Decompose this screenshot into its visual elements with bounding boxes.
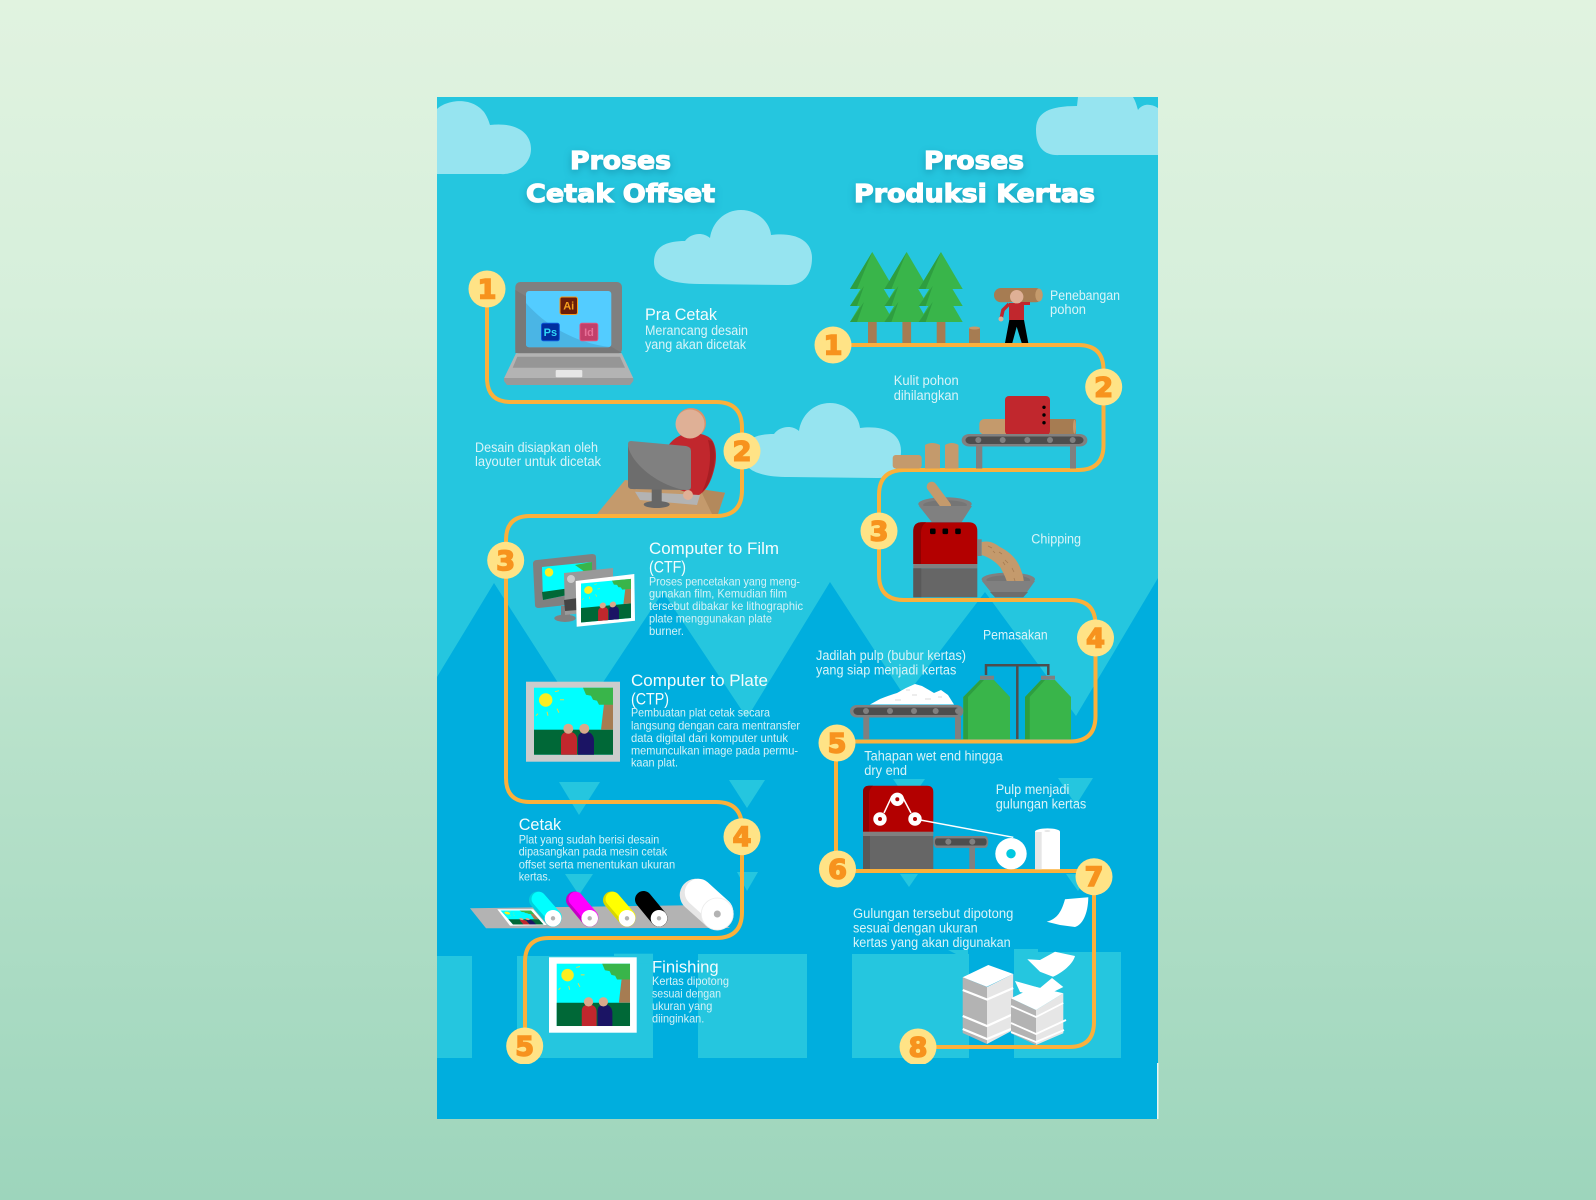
- text: Jadilah pulp: yang siap menjadi kertas: [816, 662, 957, 677]
- badge 1 right: [814, 326, 852, 364]
- text: Kulit pohon dihilangkan: Kulit pohon: [894, 373, 959, 388]
- text: Jadilah pulp: Jadilah pulp (bubur kertas): [816, 648, 966, 663]
- text: Computer to Film: gunakan film, Kemudian film: [649, 587, 787, 601]
- text: Tahapan wet end: dry end: [864, 763, 907, 778]
- panel edge line: [1157, 1063, 1158, 1119]
- text: Pulp menjadi gulungan: gulungan kertas: [996, 797, 1087, 812]
- badge 1 right: 1: [824, 330, 842, 362]
- badge 8 right: 8: [909, 1032, 927, 1064]
- icon: finished print: [549, 957, 637, 1033]
- icon: chipping machine: [913, 487, 1035, 597]
- badge 3 right: 3: [870, 516, 888, 548]
- icon: pine trees: [850, 252, 980, 343]
- icon: debarking machine: [893, 396, 1087, 468]
- badge 8 right: [900, 1028, 936, 1066]
- text: Gulungan tersebut: sesuai dengan ukuran: [853, 920, 978, 935]
- title: Proses Produksi Kertas: Produksi Kertas: [854, 179, 1095, 208]
- icon: laptop with design apps: [504, 282, 633, 385]
- text: Kulit pohon dihilangkan: [894, 373, 959, 403]
- text: Computer to Film: [649, 539, 803, 638]
- badge 2 left: [724, 432, 760, 470]
- badge 6 right: [819, 850, 856, 888]
- icon: laptop with design apps: Ps: [544, 327, 557, 339]
- text: Cetak: [519, 815, 675, 884]
- text: Cetak: dipasangkan pada mesin cetak: [519, 845, 667, 859]
- badge 4 left: [724, 818, 760, 855]
- text: Gulungan tersebut: kertas yang akan digunakan: [853, 935, 1011, 950]
- title: Proses Cetak Offset: [526, 146, 715, 208]
- text: Computer to Film: Proses pencetakan yang meng-: [649, 574, 800, 588]
- text: Jadilah pulp: [816, 648, 966, 677]
- badge 3 right: [860, 512, 898, 550]
- title: Proses Cetak Offset: Proses: [570, 146, 671, 175]
- text: Computer to Plate: memunculkan image pada permu-: [631, 743, 798, 757]
- badge 4 right: [1077, 620, 1114, 656]
- badge 3 left: [487, 542, 524, 579]
- text: Computer to Film: burner.: [649, 624, 684, 638]
- badge 1 left: 1: [478, 274, 496, 306]
- text: Penebangan pohon: Penebangan: [1050, 288, 1120, 303]
- title: Proses Produksi Kertas: [854, 146, 1095, 208]
- text: Cetak: kertas.: [519, 870, 551, 884]
- text: Penebangan pohon: [1050, 288, 1120, 317]
- text: Computer to Plate: Pembuatan plat cetak secara: [631, 706, 770, 720]
- text: Computer to Plate: kaan plat.: [631, 756, 678, 770]
- icon: cooking tanks and pulp conveyor: [850, 665, 1071, 739]
- text: Cetak: offset serta menentukan ukuran: [519, 857, 675, 871]
- badge 2 right: [1085, 368, 1122, 406]
- text: Desain disiapkan: [475, 440, 601, 469]
- text: Tahapan wet end: [864, 749, 1003, 778]
- badge 5 left: 5: [515, 1032, 534, 1062]
- background panel: [437, 97, 1158, 1119]
- text: Tahapan wet end: Tahapan wet end hingga: [864, 749, 1003, 764]
- icon: laptop with design apps: Ai: [563, 300, 574, 312]
- text: Computer to Film: (CTF): [649, 558, 686, 577]
- title: Proses Cetak Offset: Cetak Offset: [526, 179, 715, 208]
- infographic poster: [437, 97, 1158, 1119]
- text: Pulp menjadi gulungan: Pulp menjadi: [996, 782, 1069, 797]
- badge 7 right: 7: [1085, 862, 1103, 893]
- badge 4 right: 4: [1086, 624, 1105, 654]
- text: Gulungan tersebut: Gulungan tersebut dipotong: [853, 906, 1013, 921]
- text: Pulp menjadi gulungan: [996, 782, 1087, 812]
- badge 1 left: [468, 270, 506, 308]
- text: Desain disiapkan: Desain disiapkan oleh: [475, 440, 598, 455]
- icon: offset press rollers: [470, 892, 733, 930]
- right orange path: [833, 345, 1104, 1047]
- text: Pra Cetak: yang akan dicetak: [645, 337, 746, 352]
- badge 3 left: 3: [496, 546, 515, 577]
- text: Penebangan pohon: pohon: [1050, 302, 1086, 317]
- title: Proses Produksi Kertas: Proses: [924, 146, 1024, 175]
- text: Finishing: Finishing: [652, 957, 719, 976]
- text: Finishing: sesuai dengan: [652, 986, 721, 1000]
- badge 5 right: 5: [828, 728, 846, 760]
- icon: computer to film monitors and photo: [533, 554, 635, 627]
- text: Pra Cetak: Pra Cetak: [645, 305, 717, 324]
- text: Cetak: Cetak: [519, 815, 562, 834]
- icon: lumberjack carrying log: [994, 288, 1043, 343]
- badge 4 left: 4: [733, 822, 751, 853]
- badge 7 right: [1076, 858, 1112, 895]
- text: Computer to Film: Computer to Film: [649, 539, 779, 558]
- text: Finishing: Kertas dipotong: [652, 974, 729, 988]
- text: Computer to Film: plate menggunakan plate: [649, 612, 772, 626]
- text: Kulit pohon dihilangkan: dihilangkan: [894, 388, 959, 403]
- left orange path: [487, 289, 742, 1046]
- text: Desain disiapkan: layouter untuk dicetak: [475, 454, 601, 469]
- icon: falling sheets and paper stacks: [963, 897, 1088, 1045]
- text: Computer to Plate: Computer to Plate: [631, 671, 768, 690]
- badge 5 left: [506, 1028, 543, 1064]
- text: Pra Cetak: [645, 305, 748, 352]
- badge 5 right: [818, 724, 856, 762]
- text: Finishing: ukuran yang: [652, 999, 712, 1013]
- text: Computer to Film: tersebut dibakar ke lithographic: [649, 599, 803, 613]
- badge 2 left: 2: [733, 436, 751, 468]
- icon: layouter at computer: [597, 408, 725, 514]
- inverted triangles and blocks: [437, 778, 1121, 1058]
- icon: computer to plate image: [526, 682, 620, 762]
- text: Pra Cetak: Merancang desain: [645, 323, 748, 338]
- text: Computer to Plate: data digital dari komputer untuk: [631, 731, 788, 745]
- text: Chipping: Chipping: [1031, 531, 1081, 546]
- mountains: [437, 578, 1158, 1119]
- badge 6 right: 6: [828, 854, 847, 886]
- clouds: [437, 97, 1158, 478]
- icon: laptop with design apps: Id: [584, 327, 594, 339]
- text: Computer to Plate: langsung dengan cara mentransfer: [631, 718, 800, 732]
- text: Cetak: Plat yang sudah berisi desain: [519, 832, 659, 846]
- text: Finishing: diinginkan.: [652, 1012, 704, 1026]
- text: Computer to Plate: (CTP): [631, 690, 669, 709]
- text: Pemasakan: Pemasakan: [983, 627, 1048, 642]
- icon: paper machine and rolls: [863, 786, 1060, 869]
- text: Finishing: [652, 957, 729, 1026]
- text: Computer to Plate: [631, 671, 800, 770]
- badge 2 right: 2: [1094, 372, 1113, 404]
- text: Gulungan tersebut: [853, 906, 1013, 950]
